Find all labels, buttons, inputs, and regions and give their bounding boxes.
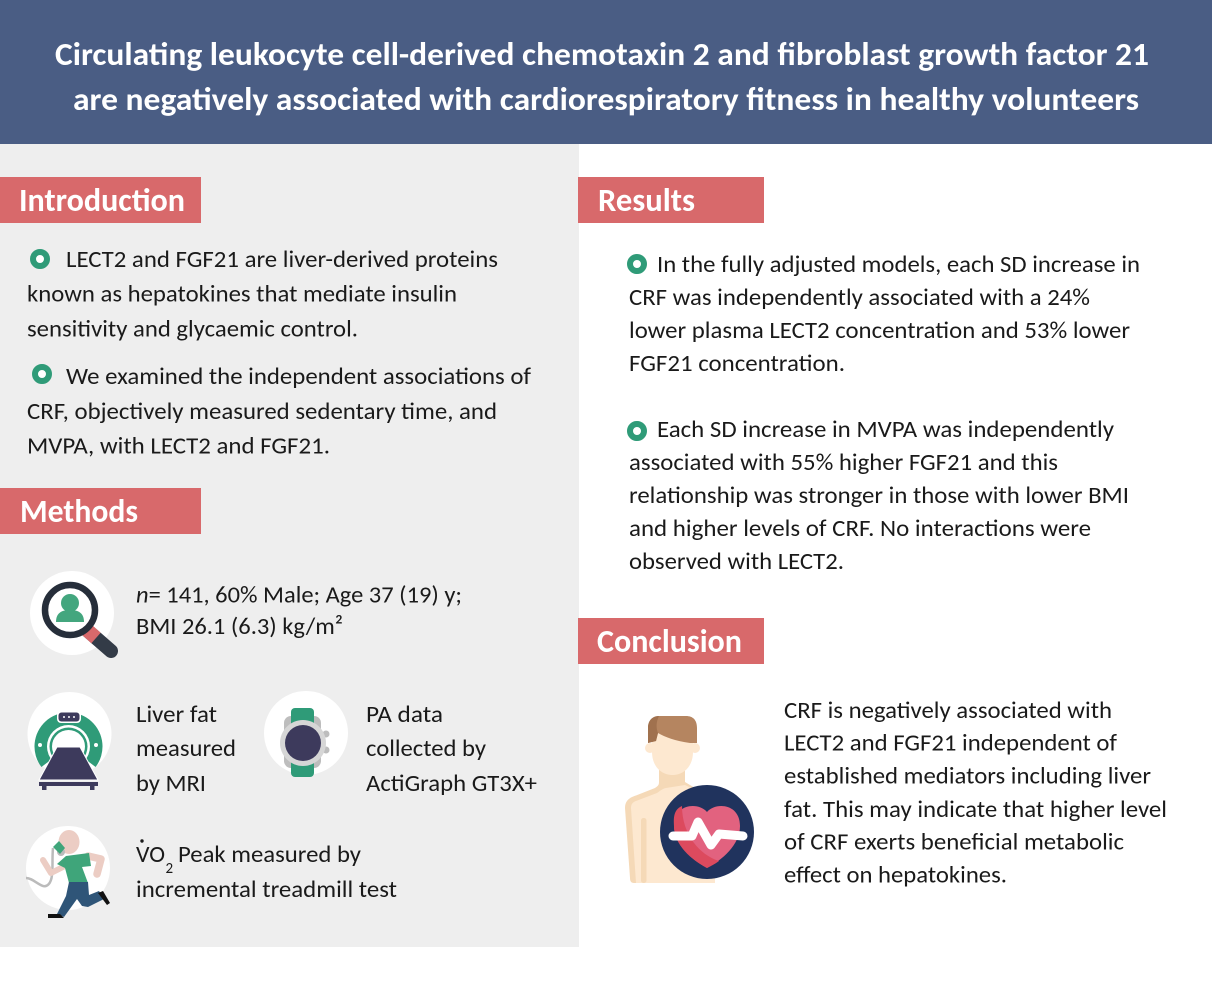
panel: results text: Each SD increase in MVPA was independently bbox=[657, 415, 1114, 444]
icon: MRI scanner bbox=[28, 692, 112, 790]
heading: Methods: Methods bbox=[20, 492, 138, 531]
text: participants: BMI 26.1 (6.3) kg/m² bbox=[136, 612, 343, 641]
text: liver fat: by MRI bbox=[136, 769, 206, 798]
panel: results text: associated with 55% higher FGF21 and this bbox=[629, 448, 1058, 477]
text: conclusion: of CRF exerts beneficial metabolic bbox=[784, 828, 1124, 856]
heading: Introduction: Introduction bbox=[19, 181, 185, 220]
text: conclusion: CRF is negatively associated with bbox=[784, 696, 1112, 725]
text: VO2 peak: Peak measured by bbox=[178, 840, 361, 869]
text: VO2 peak: VO bbox=[136, 840, 165, 869]
panel: introduction text: sensitivity and glycaemic control. bbox=[27, 314, 358, 344]
panel: results text: relationship was stronger in those with lower BMI bbox=[629, 481, 1129, 510]
text: liver fat bbox=[136, 700, 236, 798]
heading: Conclusion bbox=[578, 618, 764, 664]
heading: Results: Results bbox=[598, 181, 695, 220]
panel: results text: FGF21 concentration. bbox=[629, 349, 845, 378]
text: conclusion: established mediators including liver bbox=[784, 762, 1151, 790]
text: physical activity: ActiGraph GT3X+ bbox=[366, 769, 537, 798]
panel: results text bbox=[629, 250, 1140, 576]
text: liver fat: Liver fat bbox=[136, 700, 217, 729]
text: conclusion: LECT2 and FGF21 independent of bbox=[784, 728, 1118, 758]
text: conclusion: fat. This may indicate that higher level bbox=[784, 795, 1167, 824]
text: conclusion bbox=[784, 696, 1167, 890]
text: physical activity: collected by bbox=[366, 734, 486, 763]
panel: introduction text: MVPA, with LECT2 and FGF21. bbox=[27, 432, 330, 460]
icon: runner with mask bbox=[26, 826, 110, 918]
icon: activity watch bbox=[264, 691, 348, 777]
panel: results text: CRF was independently associated with a 24% bbox=[629, 283, 1090, 312]
text: physical activity bbox=[366, 700, 537, 798]
icon: bullet bbox=[630, 257, 644, 271]
panel: results text: In the fully adjusted models, each SD increase in bbox=[657, 250, 1140, 279]
text: VO2 peak: incremental treadmill test bbox=[136, 875, 397, 904]
panel: results text: observed with LECT2. bbox=[629, 547, 844, 576]
text: conclusion: effect on hepatokines. bbox=[784, 860, 1007, 890]
text: VO2 peak bbox=[136, 839, 397, 904]
text: liver fat: measured bbox=[136, 734, 236, 763]
panel: introduction text: CRF, objectively measured sedentary time, and bbox=[27, 397, 497, 426]
title banner: are negatively associated with cardiorespiratory fitness in healthy volunteers bbox=[73, 79, 1139, 119]
icon: person with heart bbox=[625, 716, 754, 883]
icon: magnifier with person bbox=[30, 571, 114, 655]
panel: introduction text: known as hepatokines that mediate insulin bbox=[27, 280, 457, 308]
title banner bbox=[0, 0, 1212, 144]
heading: Methods bbox=[0, 488, 201, 534]
icon: bullet bbox=[35, 367, 49, 381]
panel: introduction text: We examined the independent associations of bbox=[66, 362, 532, 391]
panel: results text: and higher levels of CRF. No interactions were bbox=[629, 514, 1091, 543]
panel: introduction text bbox=[27, 245, 532, 460]
panel: results text: lower plasma LECT2 concentration and 53% lower bbox=[629, 316, 1130, 345]
title banner: Circulating leukocyte cell-derived chemotaxin 2 and fibroblast growth factor 21 bbox=[55, 34, 1149, 74]
text: participants bbox=[136, 580, 462, 641]
icon: bullet bbox=[630, 424, 644, 438]
heading: Results bbox=[578, 177, 764, 223]
text: physical activity: PA data bbox=[366, 700, 443, 729]
text: participants: n= 141, 60% Male; Age 37 (19) y; bbox=[136, 580, 462, 610]
panel: left background bbox=[0, 144, 579, 947]
heading: Introduction bbox=[0, 177, 201, 223]
heading: Conclusion: Conclusion bbox=[597, 622, 742, 661]
icon: bullet bbox=[33, 252, 47, 266]
panel: introduction text: LECT2 and FGF21 are liver-derived proteins bbox=[66, 245, 498, 274]
text: VO2 peak: 2 bbox=[166, 860, 173, 878]
